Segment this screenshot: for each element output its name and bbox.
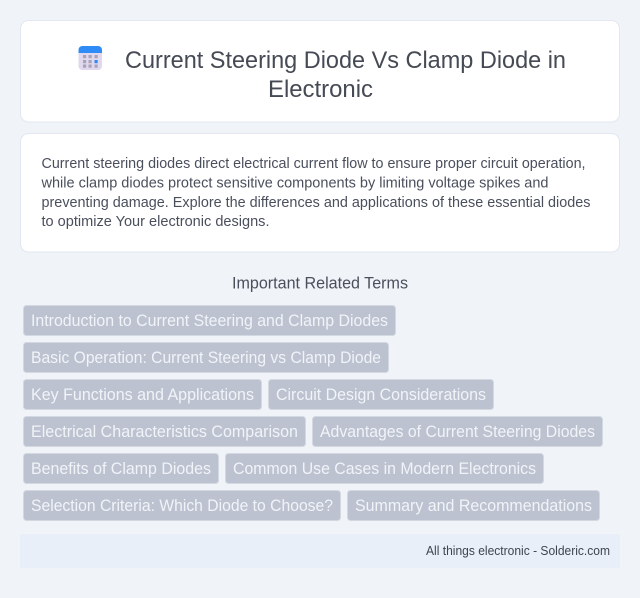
footer text: All things electronic - Solderic.com: [426, 544, 610, 558]
tag: summary: [348, 490, 600, 520]
tag: common use cases: [226, 454, 544, 484]
related term tags: [24, 306, 602, 520]
title heading: Electronic: [268, 76, 373, 103]
tag: circuit design: [268, 380, 494, 410]
panel: description: [20, 134, 620, 252]
description text: preventing damage. Explore the differences and applications of these essential diodes: [42, 195, 590, 211]
tag: circuit design: Circuit Design Considerations: [276, 386, 486, 404]
description text: while clamp diodes protect sensitive components by limiting voltage spikes and: [40, 176, 548, 192]
tag: advantages: Advantages of Current Steering Diodes: [320, 423, 595, 441]
tag: advantages: [312, 416, 602, 446]
title panel: [20, 20, 620, 122]
tag: benefits: Benefits of Clamp Diodes: [31, 460, 211, 478]
tag: key functions: Key Functions and Applications: [31, 386, 254, 404]
title heading: [125, 47, 566, 103]
title heading: Current Steering Diode Vs Clamp Diode in: [125, 47, 566, 74]
tag: introduction: Introduction to Current Steering and Clamp Diodes: [31, 312, 388, 330]
tag: summary: Summary and Recommendations: [355, 497, 592, 515]
description text: to optimize Your electronic designs.: [42, 214, 270, 230]
tag: electrical characteristics: [24, 416, 306, 446]
tag: benefits: [24, 454, 218, 484]
heading: important related terms: Important Related Terms: [232, 274, 408, 292]
tag: electrical characteristics: Electrical Characteristics Comparison: [31, 423, 298, 441]
footer: [20, 534, 620, 568]
tag: common use cases: Common Use Cases in Modern Electronics: [233, 460, 536, 478]
tag: introduction: [24, 306, 396, 336]
tag: basic operation: Basic Operation: Current Steering vs Clamp Diode: [31, 349, 381, 367]
description text: Current steering diodes direct electrical current flow to ensure proper circuit operation,: [42, 156, 586, 172]
tag: key functions: [24, 380, 262, 410]
tag: selection criteria: [24, 490, 340, 520]
description text: [40, 156, 590, 230]
icon: calendar: [78, 46, 102, 70]
tag: selection criteria: Selection Criteria: Which Diode to Choose?: [31, 497, 333, 515]
tag: basic operation: [24, 342, 388, 372]
